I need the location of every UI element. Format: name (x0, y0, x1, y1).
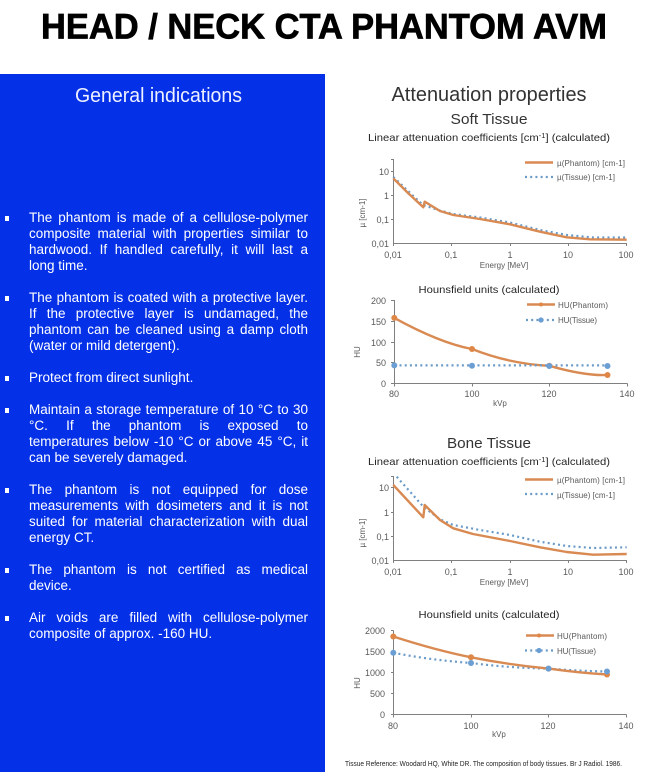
bullet: certification: device. (29, 578, 72, 593)
chart: bone tissue attenuation: 0,01 (384, 567, 402, 577)
chart: bone tissue attenuation: 1 (507, 567, 513, 577)
legend: µ(Phantom) [cm-1] (557, 476, 625, 485)
bullet: air voids (5, 610, 308, 641)
chart: bone tissue attenuation: 0,01 (371, 556, 389, 566)
chart: soft tissue attenuation: µ [cm-1] (358, 198, 367, 228)
chart: bone tissue attenuation: 10 (563, 567, 573, 577)
chart: bone tissue hounsfield units: 0 (380, 710, 385, 720)
bullet: dosimeters: energy CT. (29, 530, 94, 545)
legend: HU(Tissue) (558, 316, 597, 325)
chart: soft tissue hounsfield units: 0 (381, 379, 386, 389)
chart: bone tissue hounsfield units: 100 (463, 721, 479, 731)
chart: bone tissue hounsfield units: 140 (618, 721, 634, 731)
chart: soft tissue hounsfield units: HU (353, 346, 362, 358)
heading: bone tissue: Bone Tissue (447, 435, 531, 452)
bullet: material: hardwood. If handled carefully, it will last a (29, 242, 308, 257)
chart: soft tissue attenuation: 10 (379, 167, 389, 177)
bullet: dosimeters: measurements with dosimeters and it is not (29, 498, 308, 513)
chart: bone tissue hounsfield units (353, 626, 634, 739)
bullet: certification (5, 562, 308, 593)
chart: bone tissue attenuation: Energy [MeV] (480, 578, 528, 587)
chart: soft tissue attenuation: 0,01 (384, 250, 402, 260)
chart: bone tissue attenuation: 10 (379, 483, 389, 493)
legend: HU(Phantom) (557, 632, 607, 641)
heading: soft tissue: Soft Tissue (450, 111, 528, 128)
legend: µ(Tissue) [cm-1] (557, 491, 615, 500)
bullet: storage temperature: Maintain a storage temperature of 10 °C to 30 (29, 402, 308, 417)
chart: bone tissue hounsfield units: 500 (370, 689, 385, 699)
legend (525, 476, 625, 500)
bullet: storage temperature: temperatures below -10 °C or above 45 °C, it (29, 434, 308, 449)
title: HEAD / NECK CTA PHANTOM AVM (41, 8, 607, 46)
bullet: material: long time. (29, 258, 88, 273)
chart: bone tissue hounsfield units: kVp (492, 730, 506, 739)
bullet: dosimeters: suited for material characterization with dual (29, 514, 308, 529)
chart: bone tissue hounsfield units: 1000 (365, 668, 385, 678)
chart: soft tissue attenuation: 0,1 (445, 250, 457, 260)
bullet: coating: If the protective layer is undamaged, the (29, 306, 308, 321)
legend (525, 159, 625, 182)
chart title: bone tissue linear attenuation: -1 (539, 457, 546, 464)
legend: HU(Phantom) (558, 301, 608, 310)
chart title: soft tissue linear attenuation: Linear attenuation coefficients [cm (368, 132, 527, 144)
chart: bone tissue attenuation: 0,1 (445, 567, 457, 577)
bullet: dosimeters: The phantom is not equipped for dose (29, 482, 308, 497)
bullet: air voids: composite of approx. -160 HU. (29, 626, 212, 641)
chart: bone tissue hounsfield units: 120 (540, 721, 556, 731)
heading: general indications: General indications (75, 85, 242, 107)
bullet: material: The phantom is made of a cellulose-polymer (29, 210, 308, 225)
chart: soft tissue hounsfield units: 100 (371, 338, 386, 348)
heading: attenuation properties: Attenuation properties (392, 84, 586, 106)
chart: soft tissue attenuation: 0,1 (376, 215, 389, 225)
chart: bone tissue hounsfield units: 80 (388, 721, 398, 731)
chart: soft tissue hounsfield units: 140 (619, 389, 635, 399)
bullet: coating: The phantom is coated with a protective layer. (29, 290, 308, 305)
chart title: bone tissue linear attenuation: ] (calculated) (545, 456, 610, 468)
chart: soft tissue hounsfield units: 150 (371, 317, 386, 327)
chart: bone tissue attenuation (358, 476, 634, 587)
chart title: bone tissue hounsfield units: Hounsfield units (calculated) (418, 609, 560, 621)
chart: soft tissue hounsfield units: 120 (541, 389, 557, 399)
chart title: soft tissue linear attenuation: ] (calculated) (545, 132, 610, 144)
chart title: soft tissue hounsfield units: Hounsfield units (calculated) (418, 284, 560, 296)
chart: soft tissue attenuation: 1 (384, 191, 389, 201)
chart: bone tissue hounsfield units: HU (353, 677, 362, 689)
legend: µ(Tissue) [cm-1] (557, 173, 615, 182)
chart: soft tissue attenuation: 0,01 (371, 239, 389, 249)
chart title: soft tissue linear attenuation: -1 (539, 133, 546, 140)
bullet: storage temperature: can be severely damaged. (29, 450, 187, 465)
bullet: material (5, 210, 308, 273)
bullet: coating: (water or mild detergent). (29, 338, 180, 353)
bullet: storage temperature (5, 402, 308, 465)
chart: soft tissue attenuation: 10 (563, 250, 573, 260)
chart title: bone tissue linear attenuation: Linear attenuation coefficients [cm (368, 456, 527, 468)
legend: µ(Phantom) [cm-1] (557, 159, 625, 168)
chart: soft tissue hounsfield units: 200 (371, 296, 386, 306)
chart: soft tissue attenuation: 1 (507, 250, 513, 260)
bullet: coating (5, 290, 308, 353)
bullet: air voids: Air voids are filled with cellulose-polymer (29, 610, 308, 625)
legend: HU(Tissue) (557, 647, 596, 656)
chart: soft tissue attenuation: Energy [MeV] (480, 261, 528, 270)
bullet: sunlight: Protect from direct sunlight. (29, 370, 193, 385)
chart: soft tissue attenuation: 100 (618, 250, 634, 260)
legend (525, 632, 607, 656)
legend (526, 301, 608, 325)
chart: bone tissue attenuation: µ [cm-1] (358, 518, 367, 548)
bullet: dosimeters (5, 482, 308, 545)
chart: bone tissue attenuation: 100 (618, 567, 634, 577)
chart: bone tissue hounsfield units: 2000 (365, 626, 385, 636)
chart: bone tissue hounsfield units: 1500 (365, 647, 385, 657)
chart: soft tissue hounsfield units (353, 296, 635, 408)
chart: soft tissue hounsfield units: 100 (464, 389, 480, 399)
chart: soft tissue hounsfield units: 50 (376, 358, 386, 368)
chart: soft tissue hounsfield units: kVp (493, 399, 507, 408)
tissue reference footnote: Tissue Reference: Woodard HQ, White DR. The composition of body tissues. Br J Radiol. 1986. (345, 761, 622, 768)
chart: soft tissue attenuation (358, 159, 634, 270)
chart: soft tissue hounsfield units: 80 (389, 389, 399, 399)
chart: bone tissue attenuation: 0,1 (376, 532, 389, 542)
bullet: material: composite material with properties similar to (29, 226, 308, 241)
bullet: coating: phantom can be cleaned using a damp cloth (29, 322, 308, 337)
chart: bone tissue attenuation: 1 (384, 508, 389, 518)
bullet: certification: The phantom is not certified as medical (29, 562, 308, 577)
panel: general indications (0, 74, 325, 772)
bullet: storage temperature: °C. If the phantom is exposed to (29, 418, 308, 433)
